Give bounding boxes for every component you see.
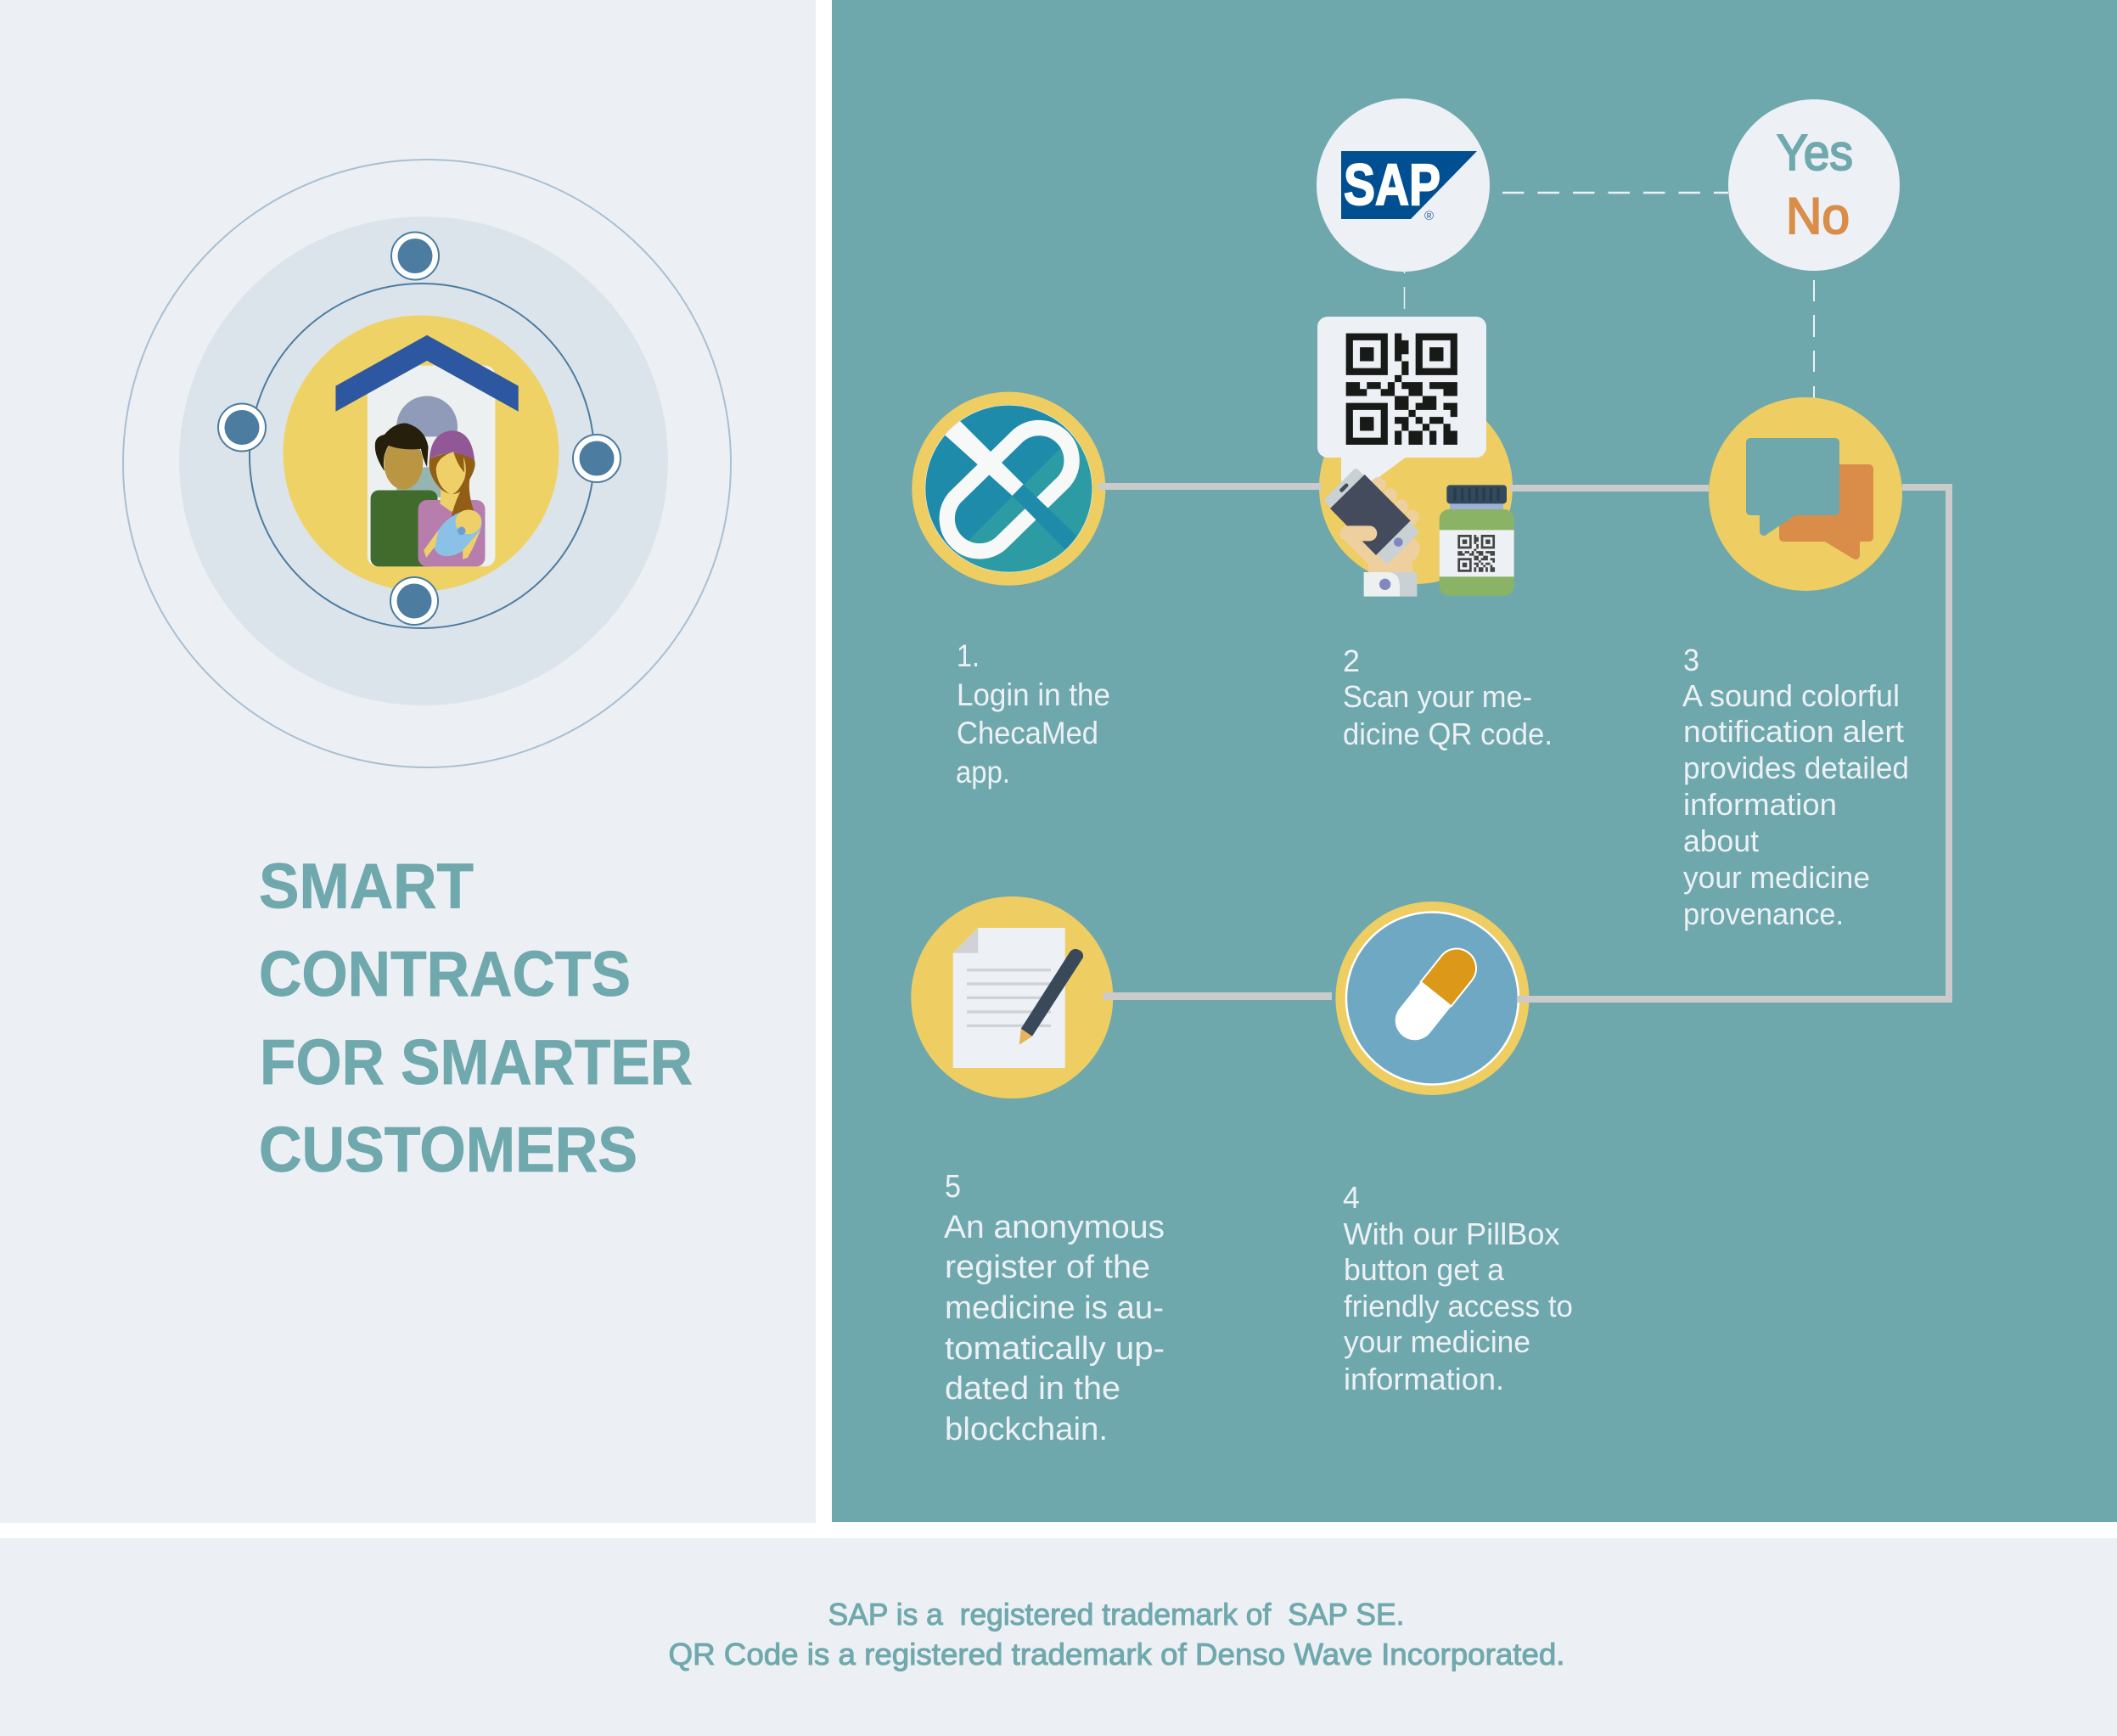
icon: SAP logo circle: ®	[1424, 209, 1434, 223]
text: step 1: 1.	[957, 638, 980, 673]
text: step 5: register of the	[945, 1250, 1150, 1285]
text: step 2	[1343, 643, 1553, 751]
text: step 1: Login in the	[957, 677, 1110, 712]
text: trademark notes: QR Code is a registered trademark of Denso Wave Incorporated.	[669, 1637, 1565, 1671]
text: step 2: Scan your me-	[1343, 679, 1532, 714]
text: step 4	[1343, 1180, 1573, 1396]
title: CONTRACTS	[259, 938, 631, 1009]
icon: Yes No circle	[1728, 99, 1900, 271]
text: step 4: button get a	[1344, 1252, 1505, 1287]
text: step 3	[1682, 643, 1909, 931]
text: step 5	[944, 1169, 1165, 1447]
illustration: family in home with orbit rings	[123, 160, 731, 767]
text: step 5: 5	[945, 1169, 961, 1205]
text: step 5: blockchain.	[945, 1412, 1108, 1447]
text: step 4: information.	[1344, 1362, 1504, 1396]
icon: step 1 app logo	[912, 392, 1107, 600]
text: step 5: medicine is au-	[945, 1290, 1164, 1326]
icon: orbit nodes	[218, 233, 620, 625]
icon: Yes No circle: No	[1786, 188, 1850, 244]
text: step 4: With our PillBox	[1343, 1216, 1560, 1251]
panel: footer	[0, 1538, 2117, 1736]
text: step 3: notification alert	[1683, 714, 1904, 749]
text: step 3: information	[1683, 787, 1837, 822]
text: step 5: An anonymous	[944, 1210, 1165, 1245]
title: FOR SMARTER	[260, 1026, 693, 1098]
text: step 2: 2	[1343, 643, 1360, 678]
title: SMART	[259, 851, 474, 922]
text: trademark notes: SAP is a registered trademark of SAP SE.	[828, 1597, 1404, 1632]
text: step 1: ChecaMed	[957, 716, 1098, 750]
text: step 4: your medicine	[1344, 1324, 1530, 1359]
title	[259, 851, 693, 1185]
text: step 3: about	[1683, 823, 1759, 858]
text: step 4: 4	[1343, 1180, 1360, 1215]
text: step 2: dicine QR code.	[1343, 716, 1553, 751]
text: trademark notes	[669, 1597, 1565, 1671]
text: step 3: provides detailed	[1683, 750, 1909, 785]
icon: medicine bottle with QR	[1440, 485, 1514, 596]
icon: hand holding phone	[1328, 471, 1420, 597]
text: step 3: 3	[1683, 643, 1699, 677]
icon: step 2 scan medicine	[1317, 317, 1514, 597]
panel: left intro	[0, 0, 816, 1523]
text: step 5: tomatically up-	[945, 1331, 1165, 1367]
title: CUSTOMERS	[259, 1114, 637, 1185]
icon: house and family	[335, 335, 519, 566]
text: step 1	[956, 638, 1110, 789]
text: step 3: your medicine	[1683, 860, 1870, 895]
icon: Yes No circle: Yes	[1777, 125, 1853, 181]
arrow: connector lines	[1098, 483, 1949, 1000]
text: step 4: friendly access to	[1344, 1289, 1573, 1323]
panel: process steps	[832, 0, 2117, 1522]
text: step 1: app.	[956, 755, 1010, 789]
icon: QR speech bubble	[1317, 317, 1486, 505]
arrow: dashed connectors	[1404, 193, 1814, 398]
text: step 5: dated in the	[945, 1371, 1120, 1407]
icon: SAP logo circle	[1317, 98, 1490, 272]
icon: step 5 document and pencil	[911, 896, 1113, 1098]
text: step 3: A sound colorful	[1682, 678, 1900, 713]
icon: step 4 pill	[1335, 902, 1529, 1095]
icon: SAP logo circle: SAP	[1344, 152, 1440, 217]
text: step 3: provenance.	[1683, 896, 1844, 931]
icon: step 3 chat bubbles	[1709, 397, 1902, 591]
